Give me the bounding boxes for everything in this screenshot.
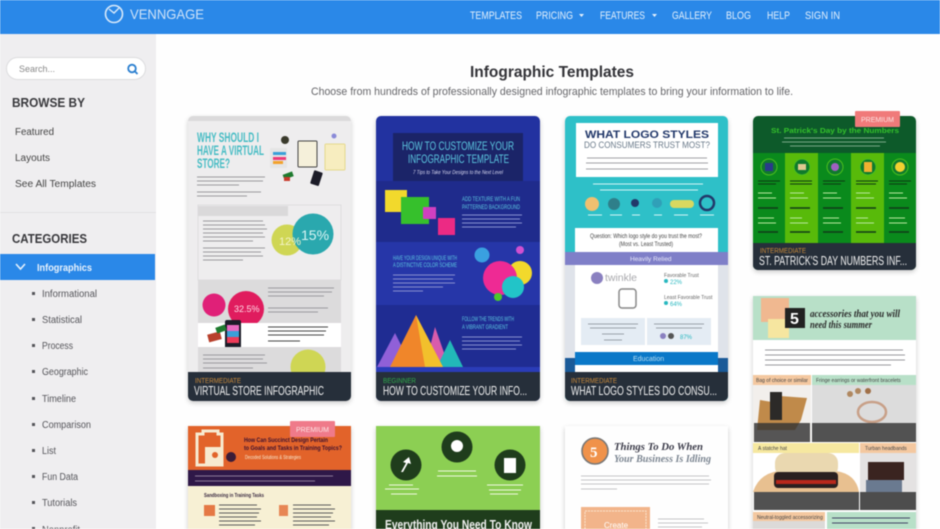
comparison panel: 87%	[680, 335, 693, 341]
card heading box	[576, 123, 718, 177]
template card: logo styles	[565, 116, 728, 401]
category list	[32, 289, 97, 529]
premium badge: PREMIUM	[296, 427, 329, 434]
icon: arrow circle	[390, 450, 422, 480]
card header	[753, 296, 916, 340]
card header: accessories that you will	[810, 308, 901, 320]
navigation links: SIGN IN	[805, 10, 840, 22]
row: bag and bracelets	[753, 375, 916, 442]
band: vibrant gradient	[376, 305, 540, 372]
caption bar	[376, 372, 540, 401]
template card: summer accessories	[753, 296, 916, 529]
card title: HAVE A VIRTUAL	[197, 143, 264, 158]
template card: St Patrick's day	[753, 111, 916, 270]
row: hat and headbands: A statche hat	[758, 446, 788, 452]
template card: things to do	[565, 426, 728, 529]
side lines	[658, 519, 708, 527]
band: color scheme: HAVE YOUR DESIGN UNIQUE WITH	[393, 255, 457, 262]
question box	[575, 228, 718, 252]
card header: Decoded Solutions & Strategies	[245, 455, 301, 461]
band: patterned background: PATTERNED BACKGROUND	[462, 204, 520, 211]
browse by heading: BROWSE BY	[12, 95, 85, 110]
template card: virtual store	[188, 116, 351, 401]
caption bar	[188, 372, 351, 401]
caption bar: INTERMEDIATE	[195, 376, 241, 385]
row: necklace	[753, 512, 916, 529]
row: necklace: Neutral-toggled accessorizing	[757, 515, 823, 521]
card title: Things To Do When	[614, 441, 703, 453]
question box: (Most vs. Least Trusted)	[619, 242, 673, 248]
purple band: Heavily Relied	[630, 256, 672, 263]
card header	[771, 126, 899, 146]
education band: Education	[633, 356, 664, 363]
icon: number badge	[582, 438, 608, 464]
caption bar: VIRTUAL STORE INFOGRAPHIC	[194, 384, 324, 398]
page subtitle: Choose from hundreds of professionally designed infographic templates to bring your information to life.	[311, 86, 793, 98]
icon: number badge: 5	[590, 445, 598, 461]
band: color scheme	[392, 245, 533, 302]
caption bar	[753, 243, 916, 270]
category list: Fun Data	[42, 472, 78, 483]
card header	[188, 426, 351, 470]
text lines	[197, 177, 265, 196]
side pattern	[565, 252, 728, 358]
five columns	[753, 153, 916, 243]
band: patterned background: ADD TEXTURE WITH A FUN	[462, 196, 520, 203]
panel: statistics one: 15%	[301, 227, 329, 243]
navigation links: PRICING	[536, 10, 573, 22]
card header: need this summer	[810, 319, 873, 331]
category list: Tutorials	[42, 498, 77, 509]
top navigation bar	[0, 0, 940, 34]
template card: instructional design	[188, 421, 351, 529]
premium badge	[290, 421, 335, 437]
sidebar	[0, 34, 156, 529]
body lines	[581, 476, 711, 489]
comparison panel: Favorable Trust	[664, 273, 699, 279]
card title	[614, 441, 711, 465]
row: bag and bracelets: Fringe earrings or waterfront bracelets	[816, 378, 901, 384]
search box: Search...	[19, 64, 55, 75]
comparison panel	[575, 265, 718, 352]
row: hat and headbands	[753, 443, 916, 510]
category list: Informational	[42, 289, 97, 300]
comparison panel: Least Favorable Trust	[664, 295, 713, 301]
category list: Statistical	[42, 315, 82, 326]
icon: document circle	[494, 450, 526, 480]
category list: Geographic	[42, 367, 88, 378]
band: patterned background	[376, 181, 540, 242]
icons: desk items	[270, 134, 345, 186]
cream body: Sandboxing in Training Tasks	[204, 493, 264, 499]
template card: everything you need	[376, 426, 540, 529]
card header: How Can Succinct Design Pertain	[244, 437, 328, 444]
caption band	[376, 510, 540, 529]
caption bar: BEGINNER	[383, 376, 416, 385]
card title: Your Business Is Idling	[614, 453, 711, 465]
card header: INFOGRAPHIC TEMPLATE	[408, 152, 509, 166]
card title	[197, 130, 264, 171]
category list: List	[42, 446, 56, 457]
caption bar	[565, 372, 728, 401]
panel: statistics one	[198, 205, 341, 280]
education band	[575, 352, 718, 372]
comparison panel: 22%	[670, 280, 683, 286]
premium badge: PREMIUM	[861, 117, 894, 124]
caption bar: INTERMEDIATE	[760, 246, 806, 255]
browse by links: Featured	[15, 127, 54, 138]
card header: to Goals and Tasks in Training Topics?	[244, 445, 342, 452]
card header: 5	[790, 311, 799, 328]
band: vibrant gradient: A VIBRANT GRADIENT	[462, 324, 508, 331]
card title: STORE?	[197, 156, 230, 171]
category list: Timeline	[42, 394, 76, 405]
caption bar: WHAT LOGO STYLES DO CONSU...	[571, 384, 717, 398]
comparison panel: 64%	[670, 302, 683, 308]
icon: head circle	[442, 432, 472, 462]
browse by links: See All Templates	[15, 179, 96, 190]
logo icons row	[585, 184, 714, 215]
template card: how to customize	[376, 116, 540, 401]
categories heading: CATEGORIES	[12, 231, 87, 246]
panel: statistics one: 12%	[279, 236, 301, 248]
band: color scheme: A DISTINCTIVE COLOR SCHEME	[393, 262, 457, 269]
card header: 7 Tips to Take Your Designs to the Next Level	[413, 170, 504, 176]
panel: statistics two: 32.5%	[234, 304, 260, 314]
card header	[393, 133, 523, 181]
logo: Venngage: VENNGAGE	[130, 6, 204, 22]
green labels	[385, 471, 523, 494]
browse by links	[15, 127, 96, 190]
search box	[6, 58, 146, 80]
page title: Infographic Templates	[470, 64, 634, 81]
comparison panel: twinkle	[605, 273, 637, 284]
navigation links: GALLERY	[672, 10, 713, 22]
card header: HOW TO CUSTOMIZE YOUR	[402, 139, 514, 153]
navigation links	[470, 10, 840, 22]
logo: Venngage	[106, 6, 204, 22]
intro lines	[765, 350, 905, 365]
category list: Comparison	[42, 420, 91, 431]
row: hat and headbands: Turban headbands	[865, 446, 907, 452]
card heading box: WHAT LOGO STYLES	[585, 129, 709, 141]
row: bag and bracelets: Bag of choice or similar	[756, 378, 808, 384]
selected category: Infographics: Infographics	[37, 263, 92, 274]
selected category: Infographics	[0, 254, 155, 280]
caption bar: INTERMEDIATE	[571, 376, 617, 385]
card header: St. Patrick's Day by the Numbers	[771, 126, 899, 135]
category list: Process	[42, 341, 73, 352]
panel: statistics two	[198, 280, 341, 373]
caption bar: HOW TO CUSTOMIZE YOUR INFO...	[383, 384, 527, 398]
premium badge	[855, 111, 900, 127]
browse by links: Layouts	[15, 153, 50, 164]
navigation links: FEATURES	[600, 10, 645, 22]
card heading box: DO CONSUMERS TRUST MOST?	[584, 140, 710, 151]
cream body	[204, 493, 335, 525]
peach block	[581, 507, 650, 529]
purple band	[565, 252, 728, 265]
navigation links: HELP	[767, 10, 790, 22]
purple band	[188, 470, 351, 486]
navigation links: TEMPLATES	[470, 10, 522, 22]
card title: WHY SHOULD I	[197, 130, 259, 145]
question box: Question: Which logo style do you trust the most?	[590, 234, 703, 240]
navigation links: BLOG	[726, 10, 751, 22]
band: vibrant gradient: FOLLOW THE TRENDS WITH	[462, 316, 514, 323]
